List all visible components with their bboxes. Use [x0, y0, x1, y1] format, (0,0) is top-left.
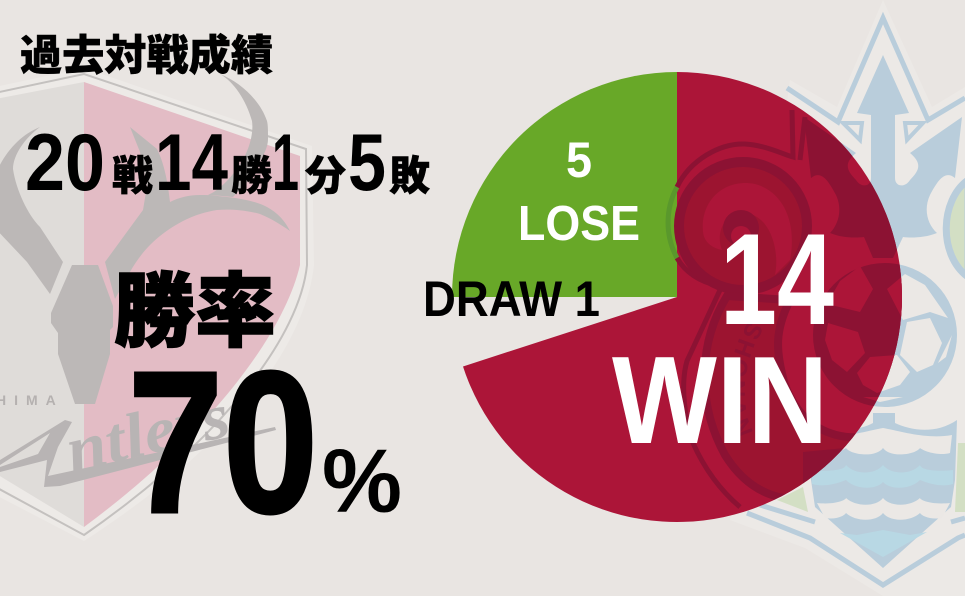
- icon: lower loop band: [705, 296, 865, 499]
- win rate value: %: [322, 432, 402, 532]
- halo: [730, 0, 965, 596]
- record line: 20戦14勝1分5敗: 勝: [231, 153, 272, 199]
- icon: antlers: [0, 74, 290, 299]
- record line: 20戦14勝1分5敗: 敗: [389, 153, 430, 199]
- label: lose count: 5: [566, 132, 592, 188]
- pie slice: win: [463, 72, 902, 522]
- record line: 20戦14勝1分5敗: 1: [272, 118, 299, 208]
- chart: pie of results: [452, 72, 902, 522]
- icon: skull: [51, 265, 113, 404]
- label: win count: [612, 206, 834, 470]
- logo overlay within pie: SHONAN: [734, 324, 762, 436]
- pie slice: lose: [452, 72, 677, 297]
- label: Antlers script: ntlers: [59, 379, 236, 486]
- title: 過去対戦成績: [20, 32, 273, 79]
- logo overlay within pie: [666, 110, 902, 509]
- record line: 20戦14勝1分5敗: 戦: [112, 153, 153, 199]
- logo: Kashima Antlers watermark: [0, 68, 314, 541]
- icon: swirl: [677, 110, 807, 507]
- record line: 20戦14勝1分5敗: [25, 118, 430, 208]
- record line: 20戦14勝1分5敗: 20: [25, 118, 105, 208]
- label: win count: WIN: [612, 332, 828, 470]
- label: lose count: [518, 132, 640, 251]
- record line: 20戦14勝1分5敗: 14: [155, 118, 228, 208]
- logo: Shonan Bellmare watermark: [730, 0, 965, 596]
- label: lose count: LOSE: [518, 197, 640, 251]
- icon: football: [813, 263, 957, 407]
- icon: crest outline: [747, 505, 965, 585]
- icon: trident: [804, 55, 962, 258]
- win rate label: 勝率: [114, 268, 276, 358]
- record line: 20戦14勝1分5敗: 5: [348, 118, 386, 208]
- icon: green crest part: [946, 180, 965, 277]
- label: loop lettering: [728, 320, 800, 474]
- win rate value: 70: [128, 329, 318, 555]
- icon: waves shield: [810, 413, 957, 568]
- label: draw count: DRAW 1: [423, 271, 600, 327]
- record line: 20戦14勝1分5敗: 分: [305, 153, 346, 199]
- icon: shield overlay: [803, 448, 844, 484]
- icon: green crest bottom: [777, 487, 808, 512]
- label: Antlers script: [0, 379, 276, 487]
- label: win count: 14: [720, 206, 834, 352]
- icon: football overlay: [813, 263, 902, 406]
